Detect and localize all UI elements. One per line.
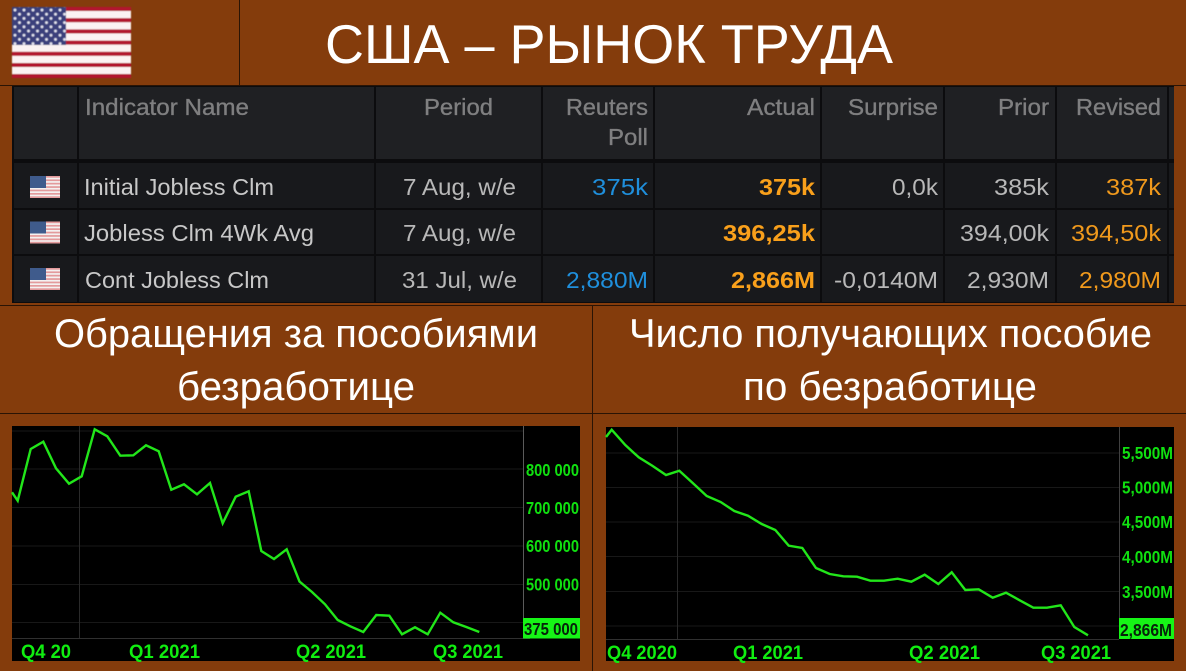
- title: США – РЫНОК ТРУДА: [325, 13, 893, 75]
- row: Cont Jobless Clm: 2,880M: [566, 267, 648, 293]
- table header row: Prior: [998, 94, 1049, 120]
- x axis labels: Q3 2021: [1041, 642, 1111, 664]
- x axis labels: [607, 642, 1111, 664]
- row: Cont Jobless Clm: Cont Jobless Clm: [85, 267, 269, 293]
- x axis labels: [21, 641, 503, 663]
- row: Jobless Clm 4Wk Avg: 7 Aug, w/e: [403, 220, 516, 246]
- heading: initial claims: безработице: [177, 365, 415, 409]
- row: Cont Jobless Clm: 2,866M: [731, 267, 815, 293]
- x axis labels: Q1 2021: [129, 641, 200, 663]
- table header row: Surprise: [848, 94, 938, 120]
- current value tag: 375 000: [524, 619, 578, 639]
- x axis labels: Q2 2021: [296, 641, 366, 663]
- row: Jobless Clm 4Wk Avg: 396,25k: [723, 220, 816, 246]
- row: Cont Jobless Clm: 31 Jul, w/e: [402, 267, 517, 293]
- table header row: Revised: [1076, 94, 1161, 120]
- y axis labels: 600 000: [526, 536, 579, 556]
- y axis labels: [1122, 443, 1173, 602]
- y axis labels: 4,000M: [1122, 547, 1173, 567]
- line series: initial jobless claims: [12, 429, 479, 634]
- row: Initial Jobless Clm: [14, 163, 1174, 208]
- x axis labels: Q3 2021: [433, 641, 503, 663]
- y axis labels: 5,000M: [1122, 478, 1173, 498]
- heading: initial claims: Обращения за пособиями: [54, 312, 538, 356]
- row: Cont Jobless Clm: [14, 256, 1174, 302]
- current value tag: 2,866M: [1120, 620, 1172, 640]
- icon: large US flag: [12, 7, 131, 78]
- row: Initial Jobless Clm: 387k: [1106, 174, 1161, 200]
- panel: initial claims chart: [12, 426, 580, 663]
- line series: continuing jobless claims: [606, 430, 1088, 635]
- table header row: Period: [424, 94, 493, 120]
- row: Cont Jobless Clm: -0,0140M: [834, 267, 938, 293]
- row: Initial Jobless Clm: 385k: [994, 174, 1049, 200]
- y axis labels: 3,500M: [1122, 582, 1173, 602]
- y axis labels: 5,500M: [1122, 443, 1173, 463]
- x axis labels: Q4 2020: [607, 642, 677, 664]
- row: Cont Jobless Clm: 2,930M: [967, 267, 1049, 293]
- header band: [12, 7, 893, 78]
- row: Jobless Clm 4Wk Avg: 394,00k: [960, 220, 1049, 246]
- row: Initial Jobless Clm: 375k: [759, 174, 816, 200]
- row: Initial Jobless Clm: Initial Jobless Clm: [84, 174, 274, 200]
- x axis labels: Q4 20: [21, 641, 71, 663]
- panel: continuing claims chart: [606, 427, 1174, 664]
- row: Cont Jobless Clm: 2,980M: [1079, 267, 1161, 293]
- row: Jobless Clm 4Wk Avg: Jobless Clm 4Wk Avg: [84, 220, 314, 246]
- y axis labels: [526, 460, 579, 594]
- table header row: Indicator Name: [85, 94, 249, 120]
- y axis labels: 4,500M: [1122, 512, 1173, 532]
- heading: continuing claims: по безработице: [743, 365, 1037, 409]
- x axis labels: Q1 2021: [733, 642, 803, 664]
- row: Initial Jobless Clm: 375k: [592, 174, 648, 200]
- table header row: [14, 87, 1174, 159]
- y axis labels: 700 000: [526, 498, 579, 518]
- table header row: Poll: [608, 124, 648, 150]
- x axis labels: Q2 2021: [909, 642, 980, 664]
- panel: data table: [12, 86, 1174, 303]
- table header row: Reuters: [566, 94, 648, 120]
- row: Jobless Clm 4Wk Avg: 394,50k: [1071, 220, 1161, 246]
- heading: continuing claims: [629, 312, 1152, 409]
- row: Jobless Clm 4Wk Avg: [14, 210, 1174, 254]
- row: Initial Jobless Clm: 7 Aug, w/e: [403, 174, 516, 200]
- y axis labels: 500 000: [526, 574, 579, 594]
- table header row: Actual: [747, 94, 815, 120]
- heading: initial claims: [54, 312, 538, 409]
- y axis labels: 800 000: [526, 460, 579, 480]
- row: Initial Jobless Clm: 0,0k: [892, 174, 938, 200]
- heading: continuing claims: Число получающих пособие: [629, 312, 1152, 356]
